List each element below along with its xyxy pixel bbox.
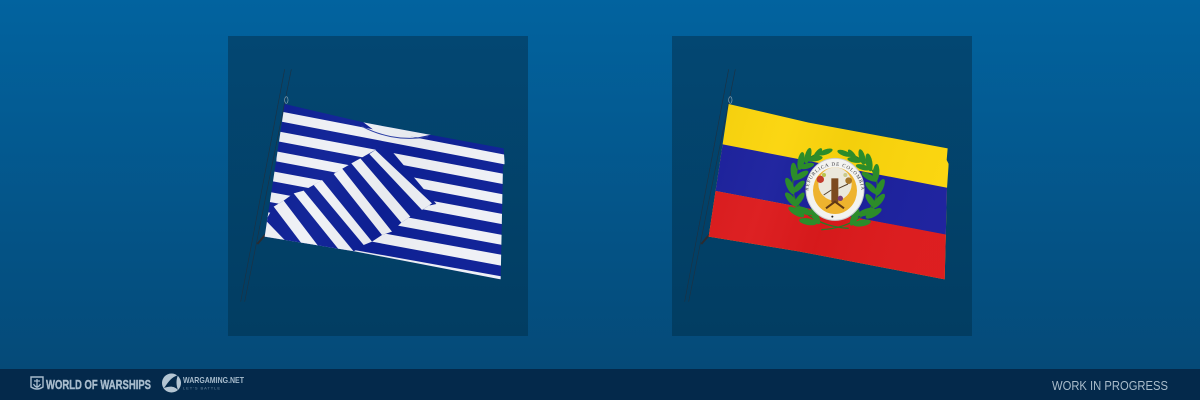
flag cloth bbox=[264, 104, 504, 280]
panel: right flag bbox=[672, 36, 972, 336]
diagonal panel bbox=[261, 148, 432, 251]
horizontal white stripes bbox=[261, 112, 505, 288]
flag pole bbox=[241, 69, 291, 302]
logo: wargaming.net: WARGAMING.NET bbox=[183, 375, 245, 385]
coat of arms bbox=[785, 148, 885, 230]
footer bar bbox=[0, 369, 1200, 400]
fold wedge bbox=[380, 150, 436, 206]
laurel wreath left bbox=[783, 147, 849, 228]
icon: wargaming circle bbox=[162, 374, 181, 392]
tricolour flag bbox=[684, 69, 949, 302]
seal inscription: REPUBLICA DE COLOMBIA bbox=[804, 162, 864, 191]
logo: world of warships: WORLD OF WARSHIPS bbox=[46, 377, 151, 392]
panel: left flag bbox=[228, 36, 528, 336]
flag cloth bbox=[708, 104, 949, 280]
flag pole bbox=[685, 69, 735, 302]
logo: wargaming.net: LET'S BATTLE bbox=[183, 386, 220, 390]
laurel wreath right bbox=[821, 148, 887, 230]
icon: world of warships shield bbox=[31, 377, 43, 389]
work in progress label: WORK IN PROGRESS bbox=[1052, 379, 1168, 393]
striped flag bbox=[241, 69, 511, 302]
top fold bbox=[363, 122, 431, 137]
logo: wargaming.net bbox=[183, 375, 245, 390]
